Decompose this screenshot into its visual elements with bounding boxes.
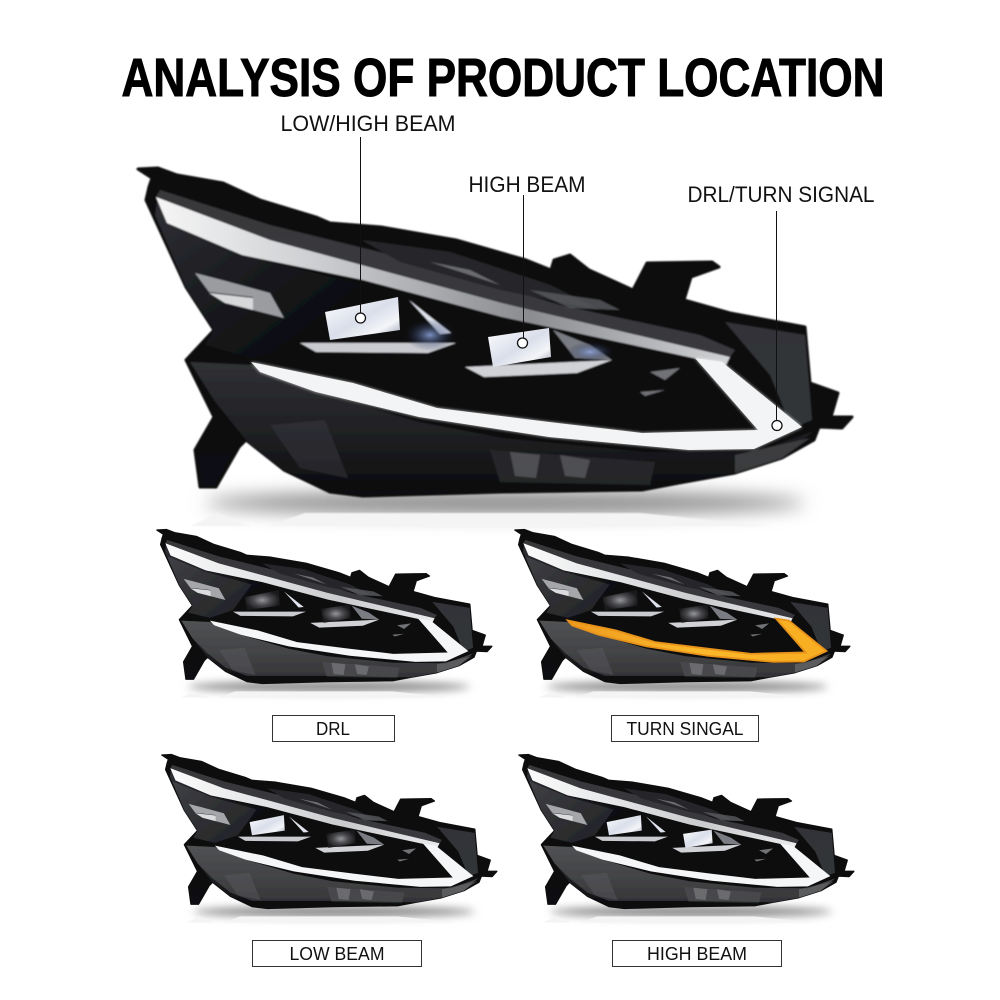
panel: turn signal state [515, 530, 850, 742]
main low/high beam lens [325, 297, 400, 340]
panel: low beam state [162, 755, 497, 966]
callout: low/high beam [280, 111, 456, 323]
label: turn signal: TURN SINGAL [626, 719, 744, 739]
main DRL strip [251, 358, 802, 450]
label: high beam [612, 940, 782, 966]
callout: high beam [468, 172, 586, 348]
main headlight [138, 168, 852, 526]
label: high beam: HIGH BEAM [647, 944, 747, 964]
callout: high beam: HIGH BEAM [468, 172, 586, 197]
headlight: high beam on [519, 755, 854, 922]
panel: DRL state [157, 530, 492, 742]
label: DRL: DRL [316, 719, 350, 739]
label: turn signal [612, 716, 758, 742]
callout: DRL/turn signal: DRL/TURN SIGNAL [688, 182, 874, 207]
headlight: turn signal on [515, 530, 850, 697]
headlight: DRL on [157, 530, 492, 697]
callout: low/high beam: LOW/HIGH BEAM [280, 111, 456, 136]
callout: DRL/turn signal [688, 182, 874, 430]
label: DRL [272, 716, 394, 742]
label: low beam: LOW BEAM [290, 944, 384, 964]
main high beam lens [488, 328, 551, 367]
label: low beam [252, 940, 422, 966]
panel: high beam state [519, 755, 854, 966]
main lens glow [404, 319, 614, 362]
headlight: low beam on [162, 755, 497, 922]
